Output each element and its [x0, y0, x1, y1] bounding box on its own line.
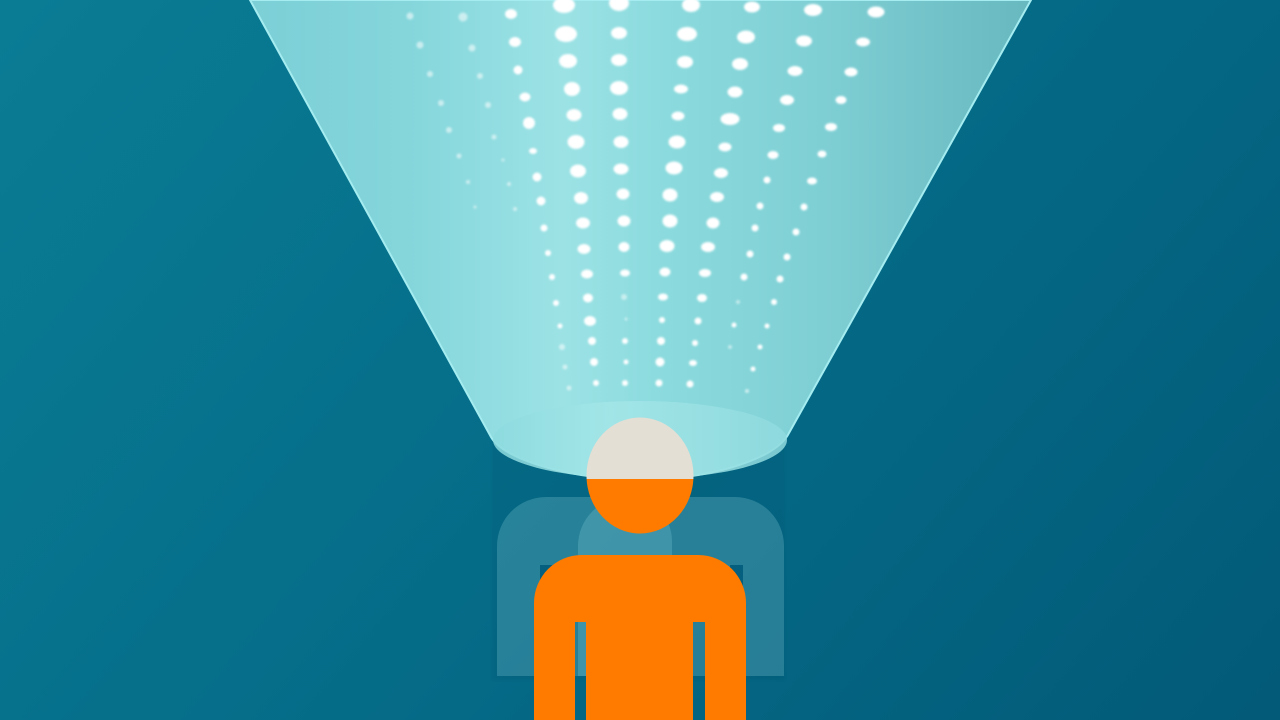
particle column: centre: [553, 0, 700, 386]
shadow band behind figures: [492, 440, 785, 680]
particle column: inner left: [505, 9, 562, 328]
ghost figure: left: [497, 497, 672, 676]
head: lit upper part: [586, 418, 694, 479]
cone floor ellipse: [493, 401, 787, 479]
ghost figures behind the person: [497, 497, 784, 676]
ghost figure: right: [578, 497, 784, 676]
ghost arm gap: right: [730, 565, 743, 595]
person body: [534, 555, 746, 720]
head: lower part: [586, 479, 694, 534]
particle column: right: [728, 4, 884, 393]
light cone: [250, 0, 1031, 480]
ghost arm gap: left: [540, 565, 552, 595]
particle column: far left: [406, 12, 511, 186]
particle column: lower left faint: [474, 206, 628, 390]
particle column: inner right: [686, 2, 760, 388]
light particles: [406, 0, 884, 393]
